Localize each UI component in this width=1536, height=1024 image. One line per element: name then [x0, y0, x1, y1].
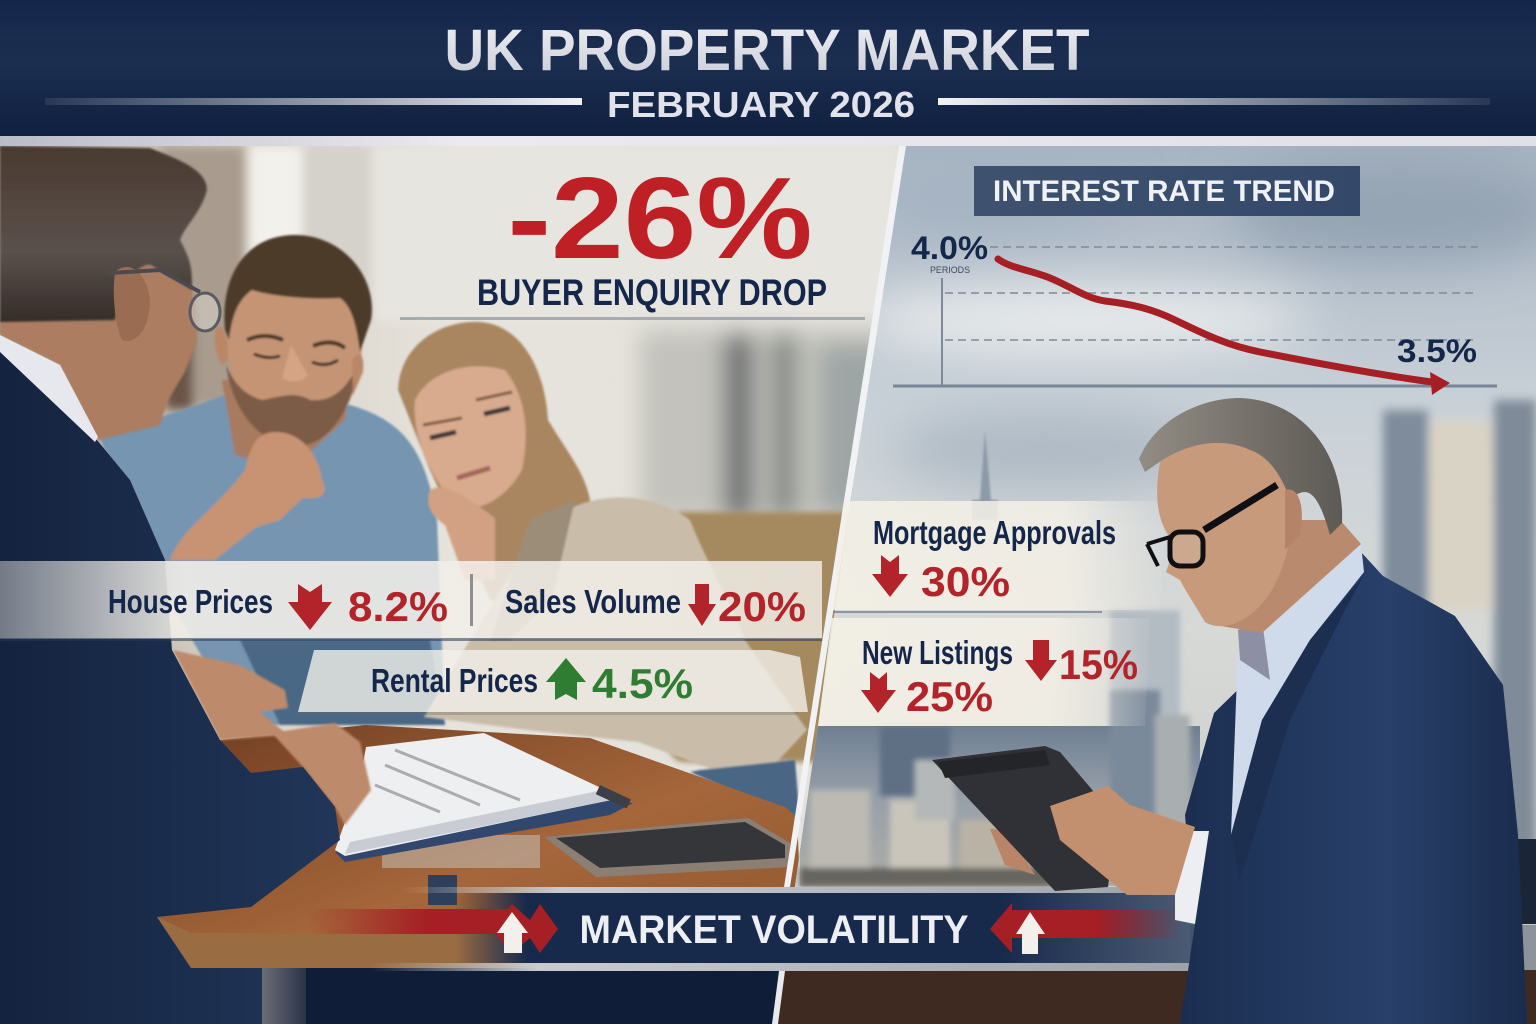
- city skyline: [800, 430, 1200, 886]
- house prices: [108, 583, 448, 630]
- man in couple: [100, 235, 445, 725]
- panel: new listings: 25%: [906, 673, 993, 720]
- panel: rental prices strip: 4.5%: [592, 660, 693, 707]
- chart title: INTEREST RATE TREND: [993, 175, 1335, 208]
- table: [157, 725, 800, 1024]
- panel: house prices and sales strip: [0, 561, 822, 641]
- banner: market volatility: MARKET VOLATILITY: [580, 908, 969, 952]
- chart: interest rate trend: [893, 166, 1497, 395]
- sales volume: 20%: [718, 583, 806, 630]
- panel: new listings: [818, 618, 1150, 726]
- house prices: House Prices: [108, 583, 273, 620]
- sales volume: Sales Volume: [505, 583, 681, 620]
- chart: interest rate trend: PERIODS: [930, 265, 970, 275]
- banner: market volatility: [308, 887, 1210, 1024]
- divider: [784, 146, 906, 887]
- sofa: [670, 512, 860, 762]
- callout: buyer enquiry drop: BUYER ENQUIRY DROP: [477, 272, 827, 313]
- chart: interest rate trend: 3.5%: [1397, 333, 1477, 369]
- chart title: [974, 166, 1360, 216]
- panel: left office scene photo: [0, 146, 910, 1024]
- house prices: 8.2%: [348, 583, 448, 630]
- tall window towers: [1383, 400, 1536, 860]
- panel: new listings: 15%: [1059, 641, 1138, 688]
- woman: [398, 322, 807, 820]
- title: UK PROPERTY MARKET: [444, 18, 1090, 83]
- callout: buyer enquiry drop: -26%: [508, 153, 812, 283]
- panel: mortgage approvals: 30%: [921, 558, 1010, 605]
- sales volume: [505, 583, 806, 630]
- callout: buyer enquiry drop: [400, 153, 865, 320]
- panel: mortgage approvals: [832, 501, 1165, 613]
- header band: [0, 0, 1536, 146]
- panel: mortgage approvals: Mortgage Approvals: [873, 514, 1116, 551]
- panel: new listings: New Listings: [862, 634, 1013, 671]
- subtitle: FEBRUARY 2026: [607, 84, 915, 125]
- arrow: left red: [308, 904, 558, 953]
- tablet: [544, 818, 790, 877]
- panel: rental prices strip: Rental Prices: [371, 662, 538, 699]
- icon: green up arrow: [546, 658, 586, 700]
- panel: rental prices strip: [298, 650, 808, 715]
- advisor: [0, 146, 371, 1024]
- arrow: right red: [990, 903, 1182, 954]
- chart: interest rate trend: 4.0%: [911, 230, 988, 266]
- chair: [1518, 839, 1536, 924]
- papers folder: [335, 733, 633, 862]
- panel: right city scene photo: [770, 146, 1536, 1024]
- man with tablet: [932, 398, 1527, 1024]
